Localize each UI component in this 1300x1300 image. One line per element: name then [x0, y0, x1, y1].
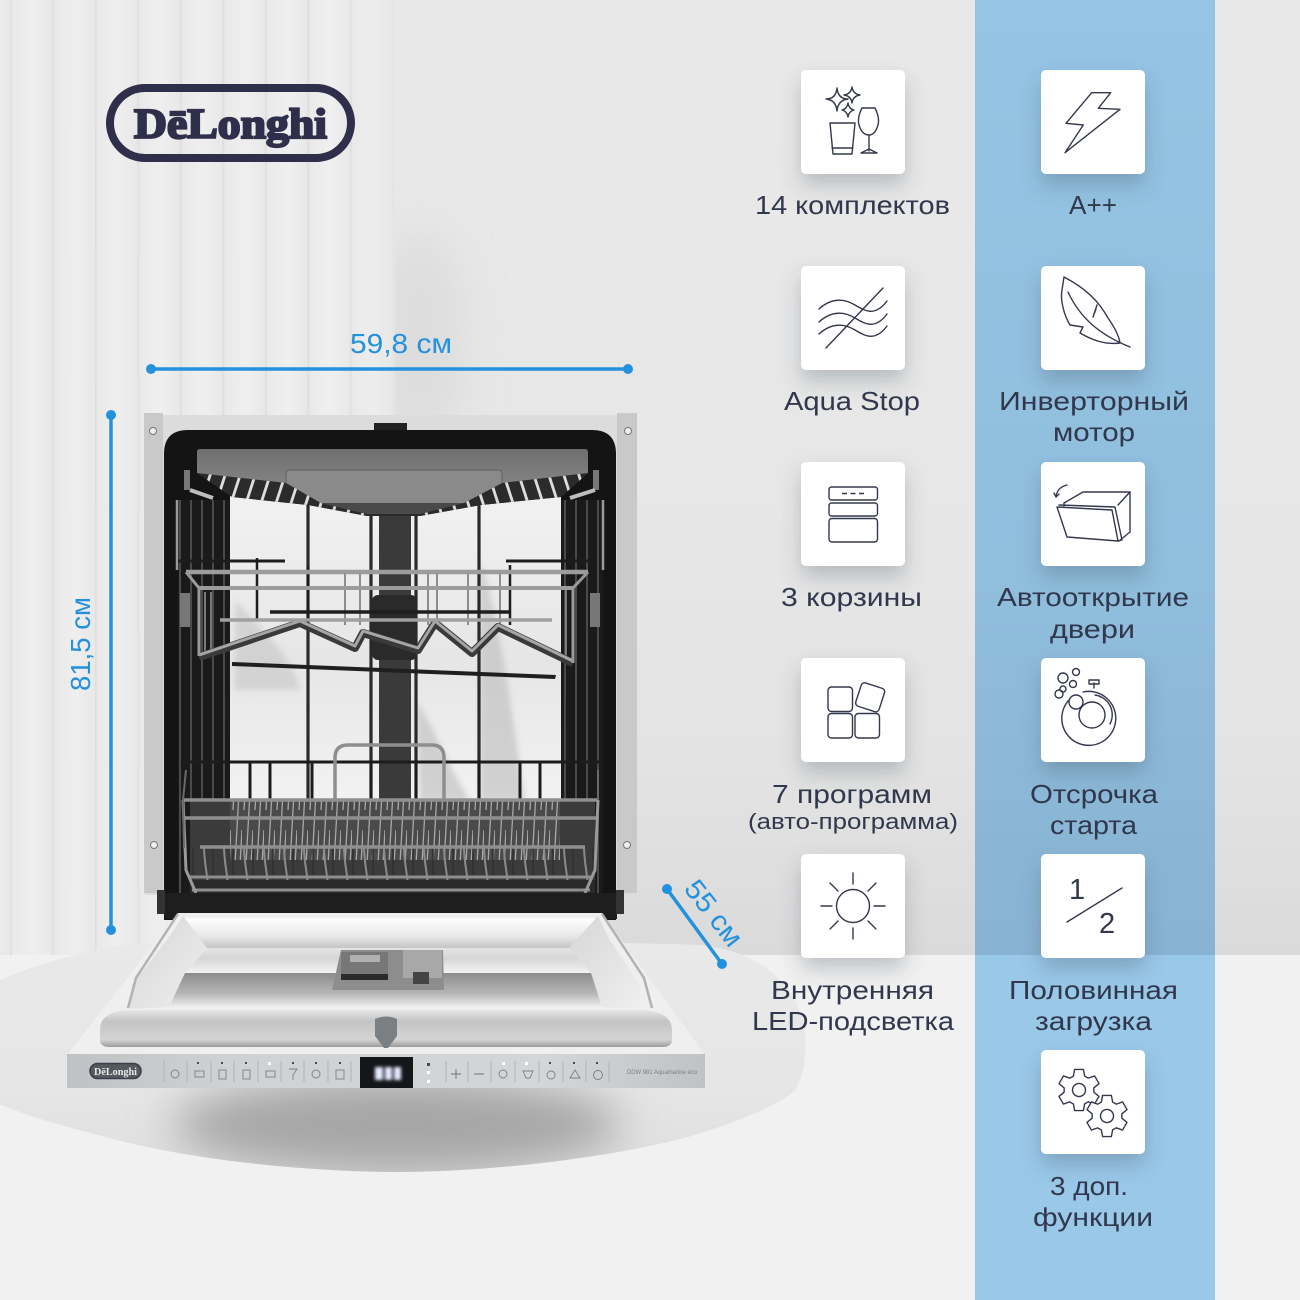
- icon: waves: [819, 288, 887, 348]
- background floor: [0, 955, 1300, 1300]
- label: 14 комплектов: [755, 190, 950, 220]
- tub floor: [165, 893, 617, 919]
- open door: [67, 913, 705, 1055]
- dimension: width: 59,8 см: [350, 328, 452, 359]
- card: half load: [1041, 854, 1145, 958]
- side walls: [177, 470, 603, 900]
- dimension: height: 81,5 см: [65, 597, 96, 691]
- icon: sun: [821, 873, 885, 939]
- panel indicator lights: [197, 1062, 598, 1083]
- label: старта: [1050, 810, 1138, 840]
- icon: plate with timer and bubbles: [1055, 668, 1116, 745]
- icon: squares: [828, 682, 886, 738]
- label: (авто-программа): [748, 809, 958, 834]
- cabinet frame: [144, 413, 637, 895]
- label: Автооткрытие: [997, 582, 1189, 612]
- dimension: height: [65, 410, 116, 935]
- label: двери: [1050, 614, 1135, 644]
- panel display: [375, 1067, 401, 1080]
- panel buttons: [164, 1061, 609, 1082]
- card: 3 baskets: [801, 462, 905, 566]
- card: inverter motor: [1041, 266, 1145, 370]
- card: energy class: [1041, 70, 1145, 174]
- blue feature column: [975, 0, 1215, 1300]
- label: [752, 975, 955, 1036]
- label: Половинная: [1009, 975, 1178, 1005]
- door hinges: [157, 890, 624, 914]
- label: мотор: [1053, 417, 1135, 447]
- lower spray arm: [232, 662, 556, 679]
- label: Внутренняя: [771, 975, 934, 1005]
- panel logo: DēLonghi: [94, 1066, 137, 1078]
- icon: one half: 1: [1069, 874, 1085, 906]
- dimension: depth: 55 см: [678, 874, 749, 953]
- icon: gears: [1051, 1062, 1135, 1144]
- icon: one half: 2: [1099, 908, 1115, 940]
- icon: stars and glasses: [826, 87, 879, 154]
- control panel: [67, 1054, 705, 1088]
- label: [748, 779, 958, 834]
- card: auto door open: [1041, 462, 1145, 566]
- card: LED light: [801, 854, 905, 958]
- dark interior opening: [164, 430, 616, 920]
- card: 7 programs: [801, 658, 905, 762]
- label: A++: [1069, 190, 1117, 220]
- label: [1009, 975, 1178, 1036]
- panel model text: DDW 981 Aquamarine eco: [627, 1070, 698, 1076]
- icon: baskets: [829, 487, 878, 542]
- card: extra functions: [1041, 1050, 1145, 1154]
- label: Aqua Stop: [784, 386, 920, 416]
- label: LED-подсветка: [752, 1006, 955, 1036]
- label: 3 доп.: [1050, 1171, 1128, 1201]
- icon: feather: [1061, 277, 1130, 347]
- podium: [0, 940, 820, 1180]
- background ribbed panel: [0, 0, 465, 960]
- card: aqua stop: [801, 266, 905, 370]
- label: [999, 386, 1189, 447]
- label: [1033, 1171, 1153, 1232]
- label: загрузка: [1035, 1006, 1153, 1036]
- card: delayed start: [1041, 658, 1145, 762]
- logo: DēLonghi: [134, 102, 327, 148]
- back wall panels: [230, 495, 561, 910]
- dimension: depth: [662, 874, 749, 969]
- label: [997, 582, 1189, 644]
- door latch: [375, 1016, 397, 1048]
- upper rack: [178, 558, 590, 663]
- lower rack: [183, 745, 600, 893]
- dishwasher: [67, 413, 705, 1088]
- icon: open door box: [1054, 485, 1130, 541]
- logo: [110, 88, 351, 158]
- label: функции: [1033, 1202, 1153, 1232]
- label: Отсрочка: [1030, 779, 1159, 809]
- label: 7 программ: [772, 779, 932, 809]
- icon: one half: [1067, 874, 1122, 940]
- card: 14 place settings: [801, 70, 905, 174]
- label: Инверторный: [999, 386, 1189, 416]
- background wall: [0, 0, 1300, 960]
- ceiling spray panel: [197, 449, 588, 516]
- icon: lightning bolt: [1065, 93, 1120, 153]
- label: 3 корзины: [781, 582, 922, 612]
- dimension: width: [146, 328, 633, 374]
- label: [1030, 779, 1159, 840]
- detergent dispenser: [332, 950, 444, 990]
